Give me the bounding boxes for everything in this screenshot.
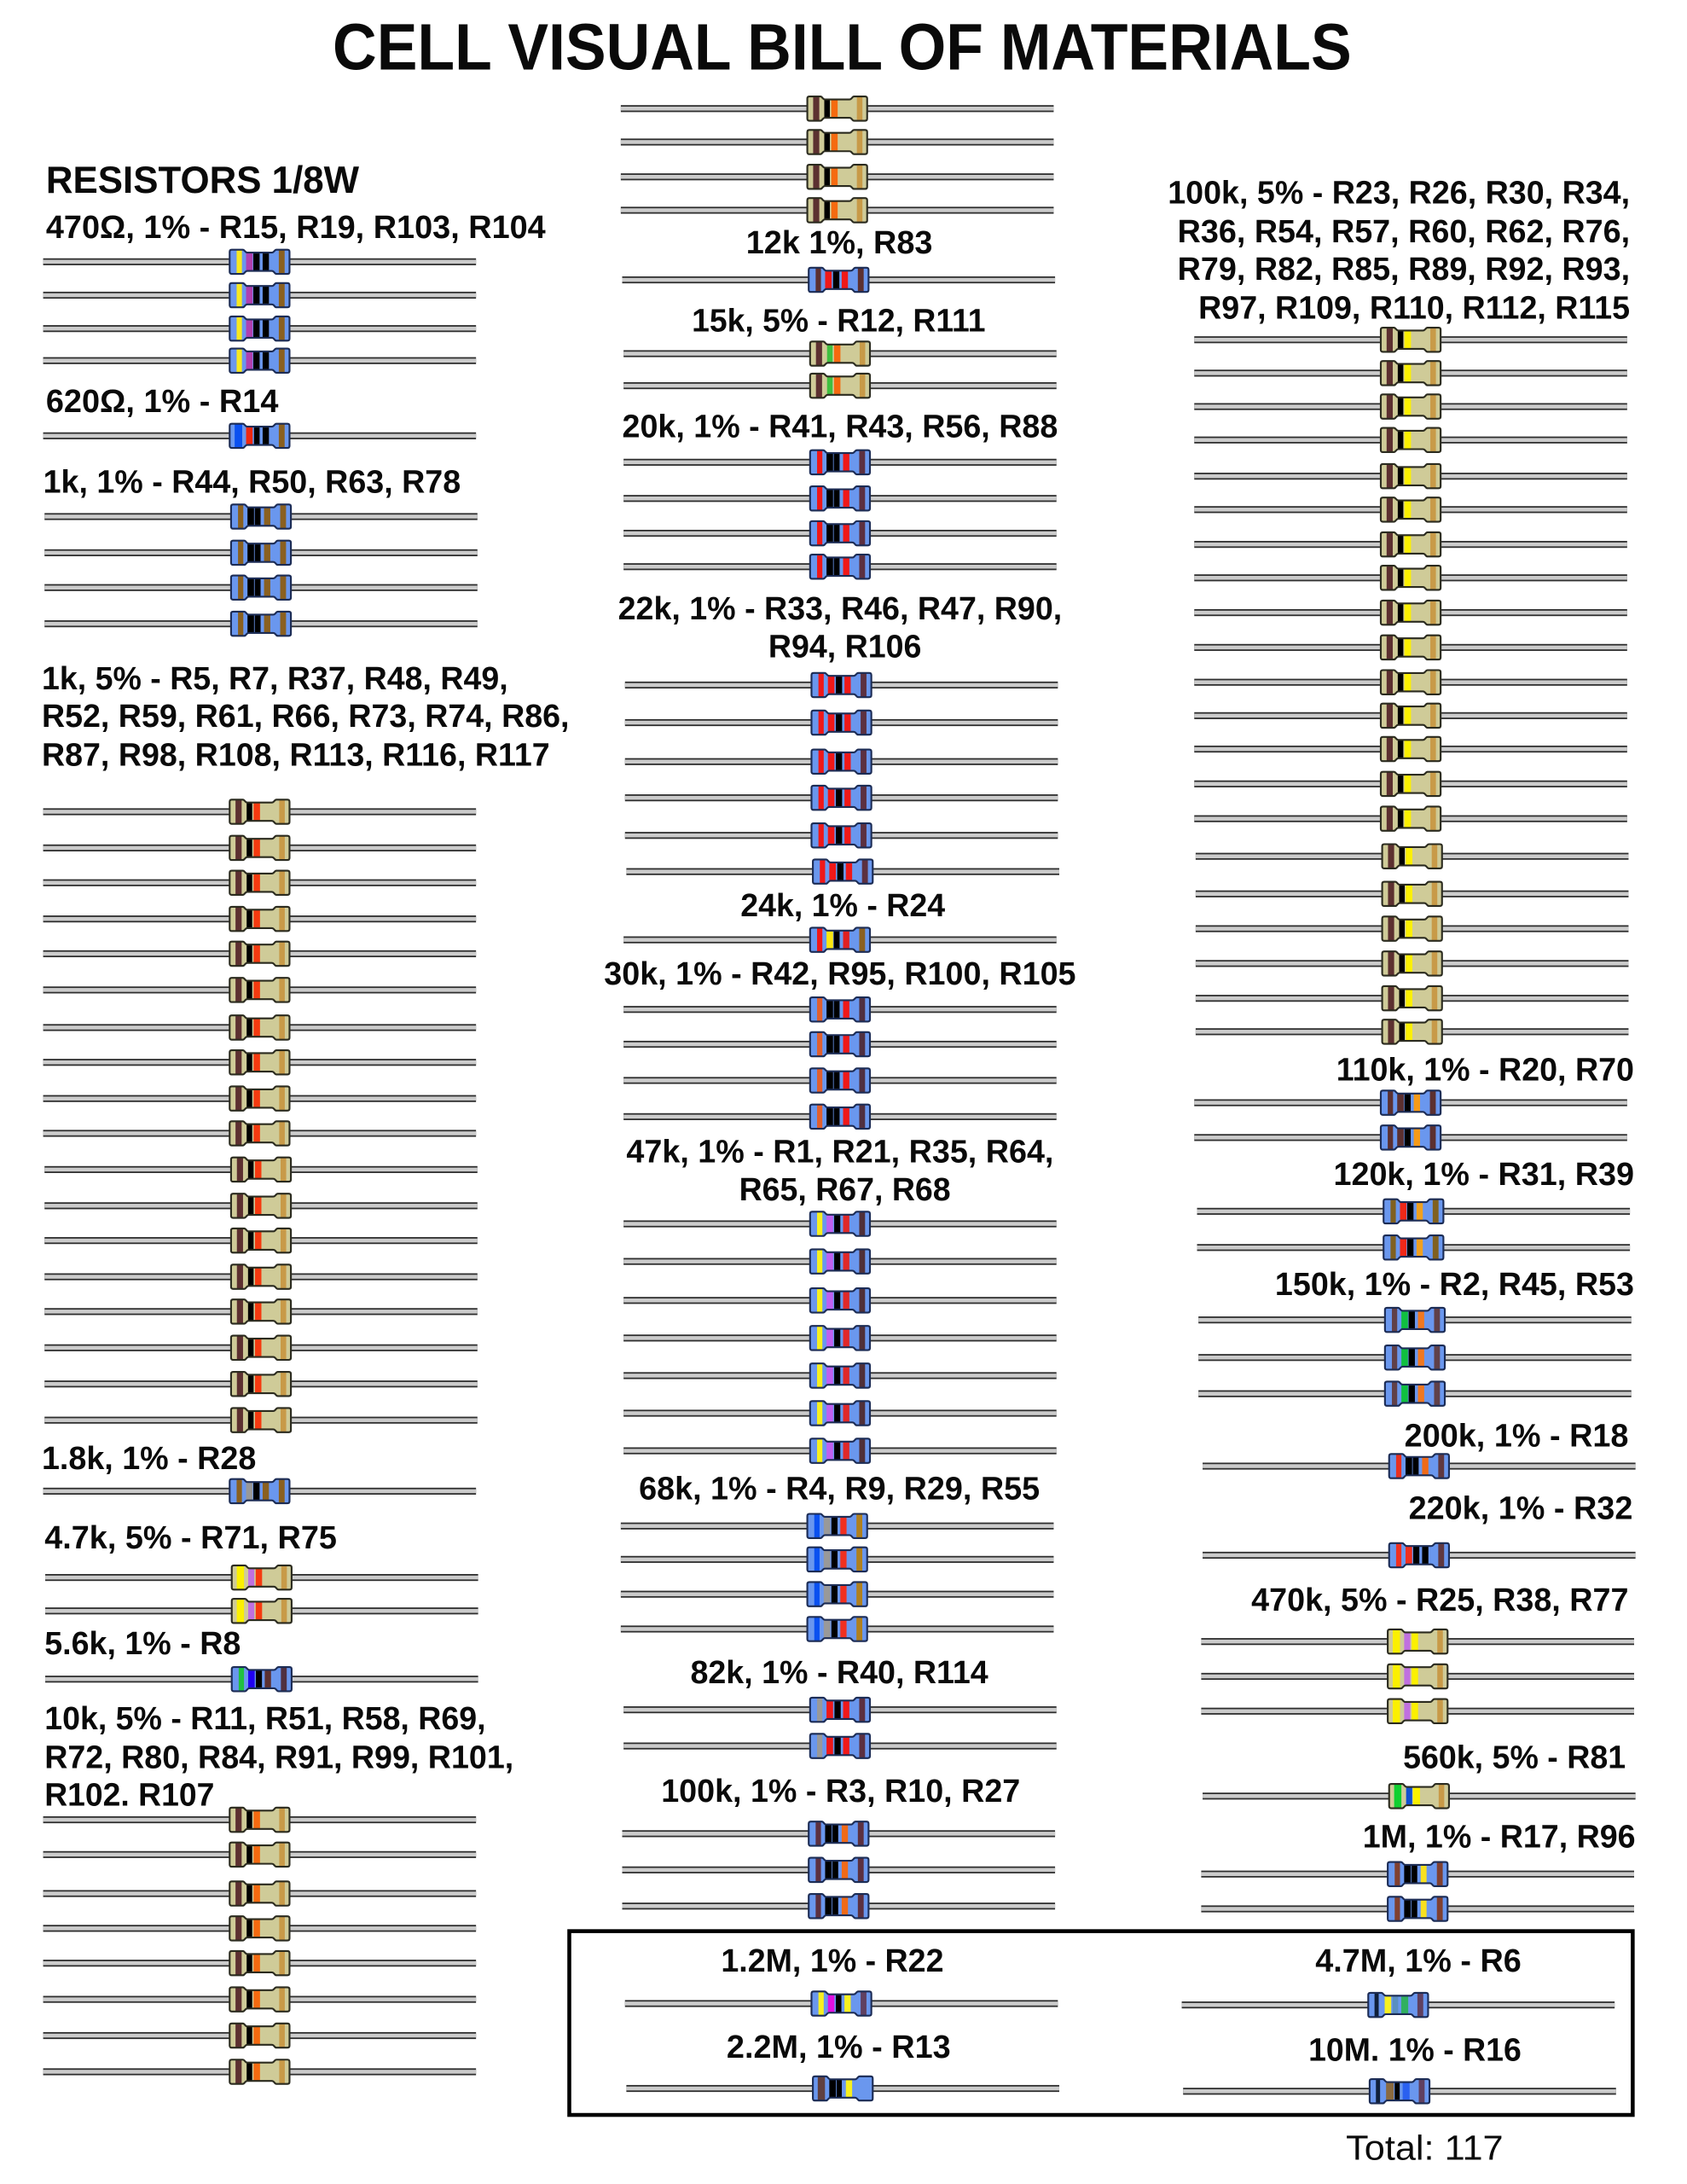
- label: 10k 5%: [44, 1700, 513, 1813]
- label: 470k: 470k, 5% - R25, R38, R77: [1251, 1582, 1628, 1618]
- label: 10M: 10M. 1% - R16: [1308, 2031, 1522, 2067]
- resistors: 10k 5% left column: [43, 1808, 476, 2084]
- group: 1k 1% resistors: [43, 464, 478, 636]
- group: 10k 5% resistors: [43, 1700, 513, 2084]
- label: 4.7M: 4.7M, 1% - R6: [1315, 1943, 1522, 1978]
- resistors: 30k row: [623, 997, 1057, 1129]
- group: 20k resistors: [623, 408, 1058, 578]
- group: 82k resistors: [623, 1654, 1057, 1758]
- label: 100k 5%: R97, R109, R110, R112, R115: [1198, 290, 1630, 326]
- resistors: 1M row: [1201, 1862, 1634, 1921]
- label: 24k: 24k, 1% - R24: [740, 887, 945, 923]
- label: 30k: 30k, 1% - R42, R95, R100, R105: [604, 956, 1076, 991]
- label: 560k: 560k, 5% - R81: [1403, 1740, 1626, 1775]
- resistors: 4.7k row: [45, 1565, 478, 1623]
- label: 10k 5%: 10k, 5% - R11, R51, R58, R69,: [44, 1700, 486, 1736]
- label: 150k: 150k, 1% - R2, R45, R53: [1275, 1266, 1634, 1302]
- label: 82k: 82k, 1% - R40, R114: [690, 1654, 988, 1690]
- group: 150k resistors: [1198, 1266, 1634, 1406]
- group: 220k resistor: [1203, 1490, 1636, 1567]
- label: 12k: 12k 1%, R83: [746, 224, 932, 260]
- label: 15k: 15k, 5% - R12, R111: [692, 302, 985, 338]
- group: 100k 1% resistors: [623, 1773, 1055, 1918]
- group: 5.6k resistor: [44, 1625, 478, 1691]
- label: 620 ohm: 620Ω, 1% - R14: [46, 383, 279, 419]
- group: 100k 5% resistors: [1168, 174, 1630, 1044]
- label: 110k: 110k, 1% - R20, R70: [1336, 1051, 1634, 1087]
- group: 68k resistors: [621, 1471, 1053, 1641]
- resistor: 5.6k: [45, 1667, 478, 1691]
- label: 2.2M: 2.2M, 1% - R13: [727, 2029, 951, 2065]
- resistors: 82k row: [623, 1698, 1057, 1758]
- label: 1k 5%: 1k, 5% - R5, R7, R37, R48, R49,: [42, 660, 508, 696]
- resistor: 24k: [623, 927, 1057, 952]
- label: 10k 5%: R72, R80, R84, R91, R99, R101,: [44, 1740, 513, 1775]
- resistors: 1k 5% row: [43, 799, 478, 1432]
- group: 1.8k resistor: [42, 1440, 476, 1503]
- label: 5.6k: 5.6k, 1% - R8: [44, 1625, 241, 1661]
- resistors: 22k row: [625, 673, 1059, 884]
- resistors: 1k 1% row: [44, 504, 478, 636]
- group: 470 ohm resistors: [43, 209, 546, 373]
- resistors: 150k row: [1198, 1308, 1632, 1406]
- label: 1k 5%: R52, R59, R61, R66, R73, R74, R86,: [42, 698, 569, 734]
- label: 1k 5%: [42, 660, 569, 773]
- total count: Total: 117: [1346, 2128, 1504, 2167]
- resistors: 20k row: [623, 450, 1057, 578]
- group: 1M resistors: [1201, 1819, 1636, 1921]
- label: 4.7k: 4.7k, 5% - R71, R75: [44, 1519, 337, 1555]
- resistors: 470 ohm row: [43, 250, 476, 373]
- resistors: 10k 5% continued at top of middle column: [621, 96, 1053, 223]
- resistor: 1.2M: [625, 1991, 1058, 2016]
- group: 47k resistors: [623, 1134, 1057, 1463]
- resistor: 2.2M: [626, 2077, 1059, 2100]
- label: 22k: R94, R106: [768, 628, 921, 664]
- label: 20k: 20k, 1% - R41, R43, R56, R88: [623, 408, 1058, 444]
- resistors: 47k row: [623, 1211, 1057, 1463]
- label: 200k: 200k, 1% - R18: [1405, 1418, 1628, 1454]
- label: 68k: 68k, 1% - R4, R9, R29, R55: [639, 1471, 1040, 1507]
- label: 47k: 47k, 1% - R1, R21, R35, R64,: [626, 1134, 1053, 1170]
- resistor: 4.7M: [1182, 1993, 1615, 2017]
- label: 22k: 22k, 1% - R33, R46, R47, R90,: [618, 590, 1062, 626]
- label: 47k: [626, 1134, 1053, 1207]
- resistor: 12k: [623, 268, 1055, 292]
- resistors: 15k row: [623, 341, 1057, 398]
- resistor: 620 ohm: [43, 424, 476, 448]
- resistor: 220k: [1203, 1543, 1636, 1567]
- resistor: 200k: [1203, 1454, 1636, 1478]
- label: 100k 5%: R79, R82, R85, R89, R92, R93,: [1178, 251, 1630, 287]
- group: 120k resistors: [1197, 1156, 1634, 1259]
- label: 22k: [618, 590, 1062, 664]
- label: 1k 5%: R87, R98, R108, R113, R116, R117: [42, 737, 550, 773]
- label: 47k: R65, R67, R68: [739, 1171, 951, 1207]
- resistors: 110k row: [1194, 1090, 1627, 1150]
- label: 1.8k: 1.8k, 1% - R28: [42, 1440, 256, 1476]
- group: 4.7k resistors: [44, 1519, 478, 1623]
- resistors: 120k row: [1197, 1199, 1630, 1259]
- group: 110k resistors: [1194, 1051, 1634, 1150]
- group: 15k resistors: [623, 302, 1057, 398]
- group: 22k resistors: [618, 590, 1062, 884]
- label: 1M: 1M, 1% - R17, R96: [1363, 1819, 1636, 1855]
- group: 470k resistors: [1201, 1582, 1634, 1723]
- resistors: 68k row: [621, 1514, 1053, 1641]
- group: 200k resistor: [1203, 1418, 1636, 1478]
- resistor: 1.8k: [43, 1479, 476, 1503]
- resistor: 10M: [1183, 2079, 1616, 2103]
- label: 100k 5%: 100k, 5% - R23, R26, R30, R34,: [1168, 174, 1630, 210]
- label: 100k 5%: [1168, 174, 1630, 326]
- group: 560k resistor: [1203, 1740, 1636, 1809]
- resistors: 100k 5% row: [1194, 328, 1628, 1044]
- label: 10k 5%: R102. R107: [44, 1777, 214, 1813]
- label: 1k 1%: 1k, 1% - R44, R50, R63, R78: [43, 464, 461, 500]
- label: 100k 1%: 100k, 1% - R3, R10, R27: [661, 1773, 1020, 1809]
- label: 1.2M: 1.2M, 1% - R22: [721, 1943, 944, 1978]
- label: 120k: 120k, 1% - R31, R39: [1333, 1156, 1634, 1192]
- section heading: resistors: RESISTORS 1/8W: [46, 160, 359, 201]
- title: CELL VISUAL BILL OF MATERIALS: [333, 12, 1352, 84]
- label: 220k: 220k, 1% - R32: [1409, 1490, 1632, 1526]
- resistors: 100k 1% row: [623, 1821, 1055, 1918]
- resistor: 560k: [1203, 1784, 1636, 1809]
- group: 12k resistor: [623, 224, 1055, 292]
- group: 24k resistor: [623, 887, 1057, 952]
- group: 1k 5% resistors: [42, 660, 569, 1432]
- label: 470 ohm: 470Ω, 1% - R15, R19, R103, R104: [46, 209, 546, 245]
- label: 100k 5%: R36, R54, R57, R60, R62, R76,: [1178, 213, 1630, 249]
- box outline: [569, 1931, 1632, 2115]
- group: 620 ohm resistor: [43, 383, 476, 448]
- group: 30k resistors: [604, 956, 1076, 1129]
- panel: boxed high-value resistors: [569, 1931, 1632, 2115]
- resistors: 470k row: [1201, 1629, 1634, 1723]
